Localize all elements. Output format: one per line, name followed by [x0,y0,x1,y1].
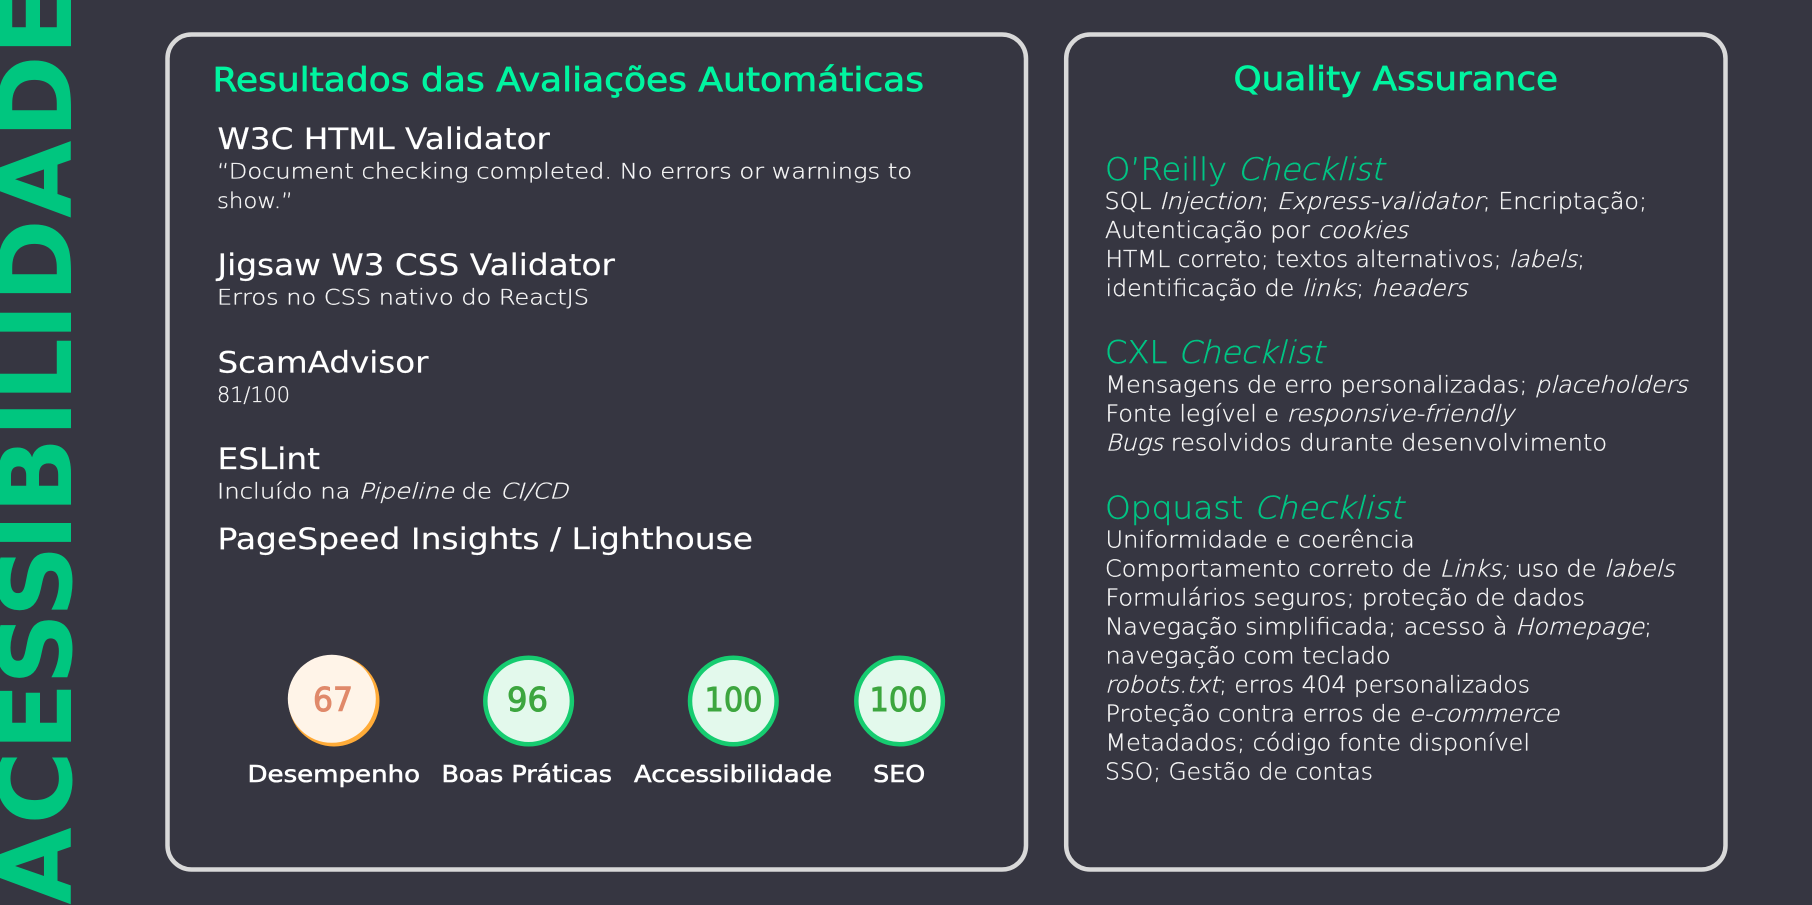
result: Jigsaw W3 CSS Validator: Jigsaw W3 CSS Validator [215,248,616,282]
score: SEO: 100 [870,680,928,719]
checklist: O'Reilly: SQL Injection; Express-validator ; Encriptação; [1104,189,1647,215]
panel frame [168,34,1026,870]
score: SEO [856,658,943,788]
score: Boas Práticas: 96 [507,680,548,719]
result: W3C HTML Validator: show.” [217,189,293,214]
checklist: Opquast: Uniformidade e coerência [1106,528,1415,554]
score: SEO: SEO [873,762,925,788]
result: ScamAdvisor: ScamAdvisor [218,346,429,380]
checklist: Opquast: robots.txt; erros 404 personalizados [1105,673,1530,699]
heading: Quality Assurance [1234,59,1558,98]
checklist: Opquast: Metadados; código fonte disponível [1106,731,1530,757]
checklist: O'Reilly: identificação de links; headers [1106,276,1469,302]
result: Jigsaw W3 CSS Validator: Erros no CSS nativo do ReactJS [217,286,589,310]
checklist: CXL [1105,335,1689,457]
score: Boas Práticas [442,658,612,788]
panel: automatic evaluation results [168,34,1026,870]
result: W3C HTML Validator: “Document checking completed. No errors or warnings to [217,160,912,184]
result: ESLint: Incluído na Pipeline de CI/CD [217,480,570,504]
panel: quality assurance [1066,34,1726,870]
checklist: CXL: Bugs resolvidos durante desenvolvimento [1106,431,1607,457]
checklist: CXL: Fonte legível e responsive-friendly [1106,402,1516,428]
panel frame [1066,34,1726,870]
checklist: O'Reilly [1104,152,1647,302]
checklist: Opquast: Comportamento correto de Links; uso de labels [1105,557,1676,583]
score: Boas Práticas: Boas Práticas [442,762,612,788]
score: Accessibilidade: 100 [704,680,762,719]
score: Accessibilidade: Accessibilidade [634,762,832,788]
checklist: Opquast: SSO; Gestão de contas [1105,760,1373,786]
heading: Resultados das Avaliações Automáticas [212,60,924,99]
checklist: CXL: Mensagens de erro personalizadas; placeholders [1106,373,1689,399]
result: W3C HTML Validator: W3C HTML Validator [218,122,551,156]
result: ScamAdvisor: 81/100 [217,383,290,408]
score: Desempenho: 67 [313,680,353,719]
result: PageSpeed Insights / Lighthouse: PageSpeed Insights / Lighthouse [218,522,753,556]
checklist: Opquast: Formulários seguros; proteção de dados [1106,586,1585,612]
result: Jigsaw W3 CSS Validator [215,248,616,310]
result: ESLint [217,442,570,504]
checklist: Opquast [1105,490,1676,786]
score: Accessibilidade [634,658,832,788]
checklist: Opquast: navegação com teclado [1106,644,1391,670]
checklist: O'Reilly: O’Reilly Checklist [1105,152,1386,188]
score: Desempenho [248,655,420,788]
result: ScamAdvisor [217,346,429,408]
checklist: O'Reilly: Autenticação por cookies [1105,218,1409,244]
checklist: Opquast: Proteção contra erros de e-commerce [1106,702,1560,728]
checklist: Opquast: Opquast Checklist [1105,490,1406,526]
checklist: O'Reilly: HTML correto; textos alternativos; labels; [1106,247,1585,273]
result: W3C HTML Validator [217,122,912,214]
checklist: Opquast: Navegação simplificada; acesso à Homepage; [1106,615,1652,641]
score: Desempenho: Desempenho [248,762,420,788]
checklist: CXL: CXL Checklist [1105,335,1327,371]
result: ESLint: ESLint [218,442,320,476]
